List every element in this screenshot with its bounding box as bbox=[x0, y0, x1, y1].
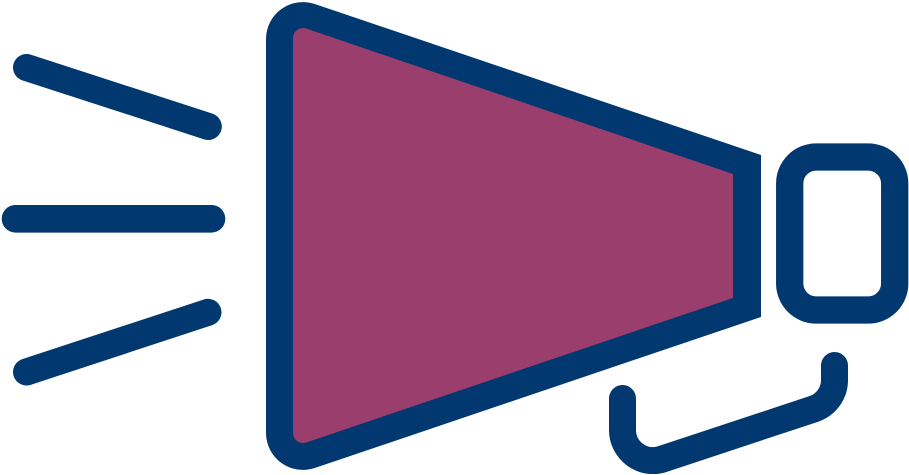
cone outline bbox=[266, 2, 761, 470]
megaphone mouthpiece bbox=[790, 157, 895, 310]
cone fill bbox=[293, 28, 733, 443]
megaphone cone bbox=[266, 2, 761, 470]
megaphone handle bbox=[622, 366, 835, 461]
sound line: middle bbox=[16, 205, 212, 233]
sound line: top bbox=[26, 68, 208, 126]
sound line: bottom bbox=[26, 312, 208, 372]
